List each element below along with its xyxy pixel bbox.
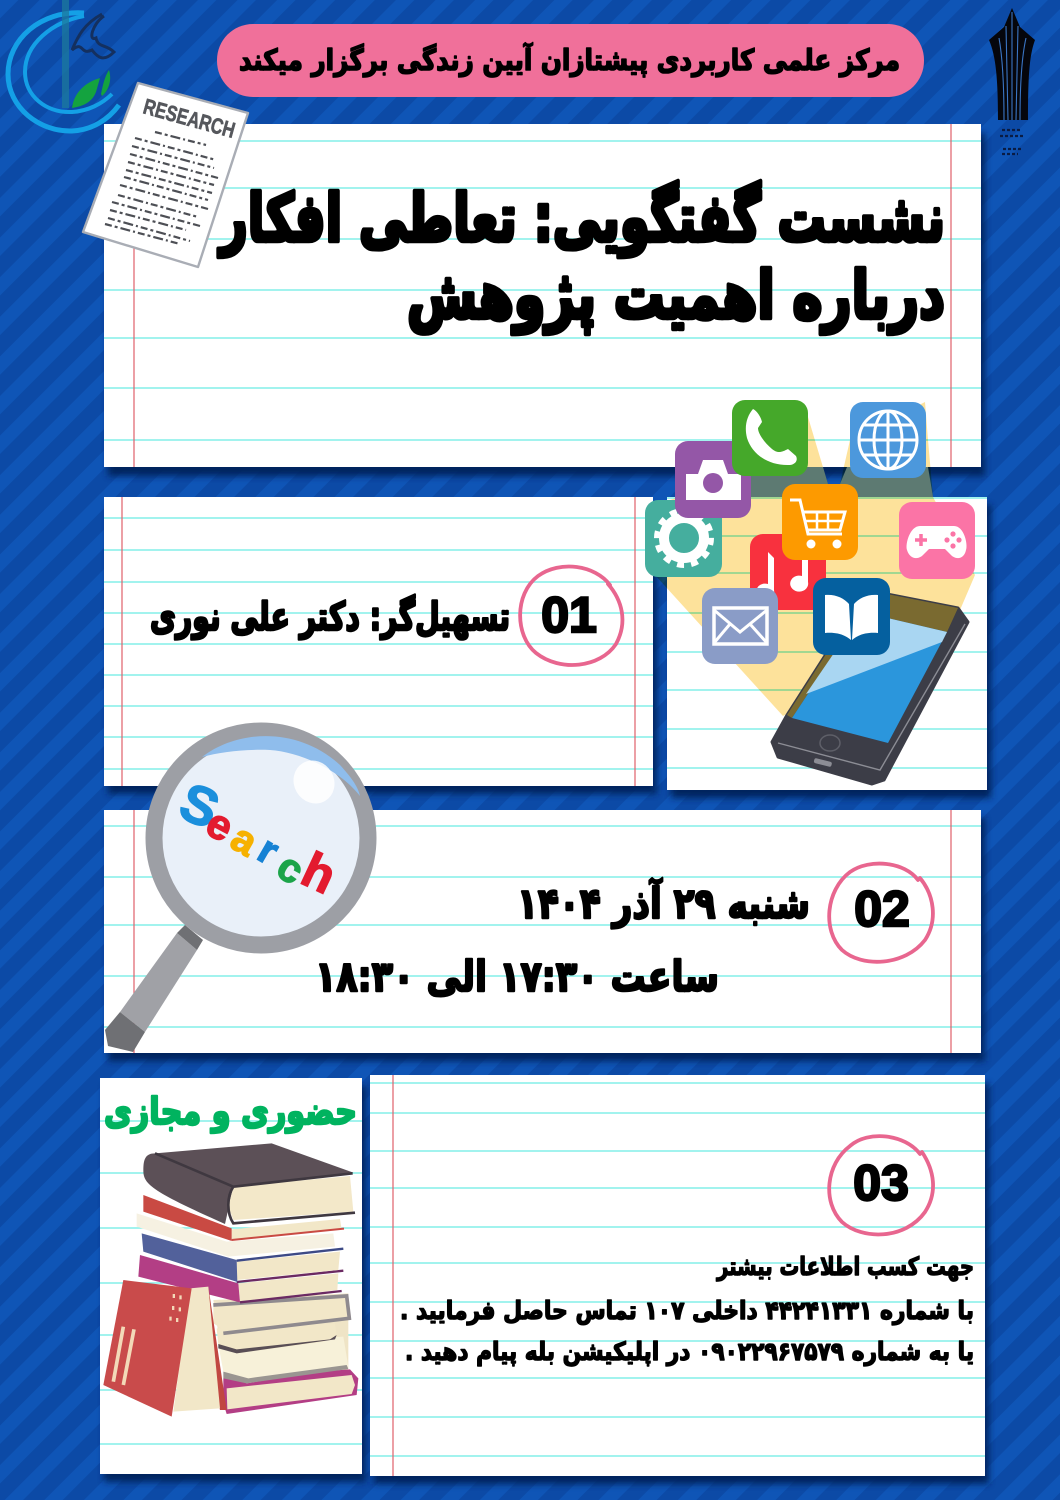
number badge 02 <box>829 864 933 962</box>
contact line three: یا به شماره ۰۹۰۲۲۹۶۷۵۷۹ در اپلیکیشن بله پیام دهید . <box>405 1337 974 1367</box>
illustration: magnifying glass <box>105 731 368 1052</box>
contact line two: با شماره ۴۴۲۴۱۳۳۱ داخلی ۱۰۷ تماس حاصل فرمایید . <box>400 1296 974 1326</box>
search word: e <box>199 798 241 851</box>
search word: r <box>250 828 286 874</box>
app icon: shopping cart <box>782 484 858 560</box>
app icon: music <box>750 534 826 610</box>
bottom books <box>213 1293 358 1414</box>
blue book <box>142 1233 343 1282</box>
app icon: camera <box>675 441 751 518</box>
logo: crescent emblem <box>8 0 119 131</box>
header text: مرکز علمی کاربردی پیشتازان آیین زندگی برگزار میکند <box>239 42 900 78</box>
contact line one: جهت کسب اطلاعات بیشتر <box>715 1252 974 1282</box>
panel: contact sheet <box>370 1075 989 1484</box>
number badge 01 <box>520 566 622 665</box>
handle <box>105 925 203 1052</box>
search word: S <box>172 771 227 841</box>
attendance mode text: حضوری و مجازی <box>104 1090 357 1133</box>
panel: books sheet <box>100 1078 366 1482</box>
app icon: game controller <box>899 502 975 579</box>
app icon: settings gear <box>645 500 722 577</box>
smartphone <box>772 590 968 784</box>
app icon: mail <box>702 588 778 664</box>
paper text rows <box>105 132 218 244</box>
panel: date sheet <box>104 810 985 1061</box>
standing red book <box>103 1280 227 1417</box>
purple book <box>138 1255 343 1302</box>
panel: apps sheet <box>667 497 991 798</box>
light beam <box>655 402 975 716</box>
date text: شنبه ۲۹ آذر ۱۴۰۴ <box>517 878 810 928</box>
search word <box>172 771 345 905</box>
illustration: apps and smartphone <box>645 400 975 784</box>
header pill <box>217 24 924 97</box>
logo: university pen emblem <box>989 8 1035 154</box>
number badge 03: 03 <box>853 1155 909 1211</box>
red book <box>143 1195 344 1241</box>
number badge 01: 01 <box>541 587 597 643</box>
title text <box>218 180 945 335</box>
app icon: book <box>813 578 890 655</box>
contact text <box>400 1252 974 1367</box>
search word: c <box>269 844 311 893</box>
panel: facilitator sheet <box>104 497 657 794</box>
facilitator text: تسهیل‌گر: دکتر علی نوری <box>150 594 510 640</box>
illustration: stack of books <box>103 1143 358 1417</box>
beam over the gap between sheets <box>735 467 933 497</box>
search word: a <box>224 816 265 865</box>
research label: RESEARCH <box>141 94 238 143</box>
number badge 02: 02 <box>854 881 910 937</box>
panel: title sheet <box>104 124 985 476</box>
dark top book <box>143 1143 355 1224</box>
white book <box>137 1213 335 1257</box>
search word: h <box>293 841 345 905</box>
number badge 03 <box>829 1136 933 1234</box>
app icon: phone <box>732 400 808 476</box>
illustration: research paper <box>83 83 248 267</box>
time text: ساعت ۱۷:۳۰ الی ۱۸:۳۰ <box>315 952 719 1001</box>
app icon: globe <box>850 402 926 478</box>
